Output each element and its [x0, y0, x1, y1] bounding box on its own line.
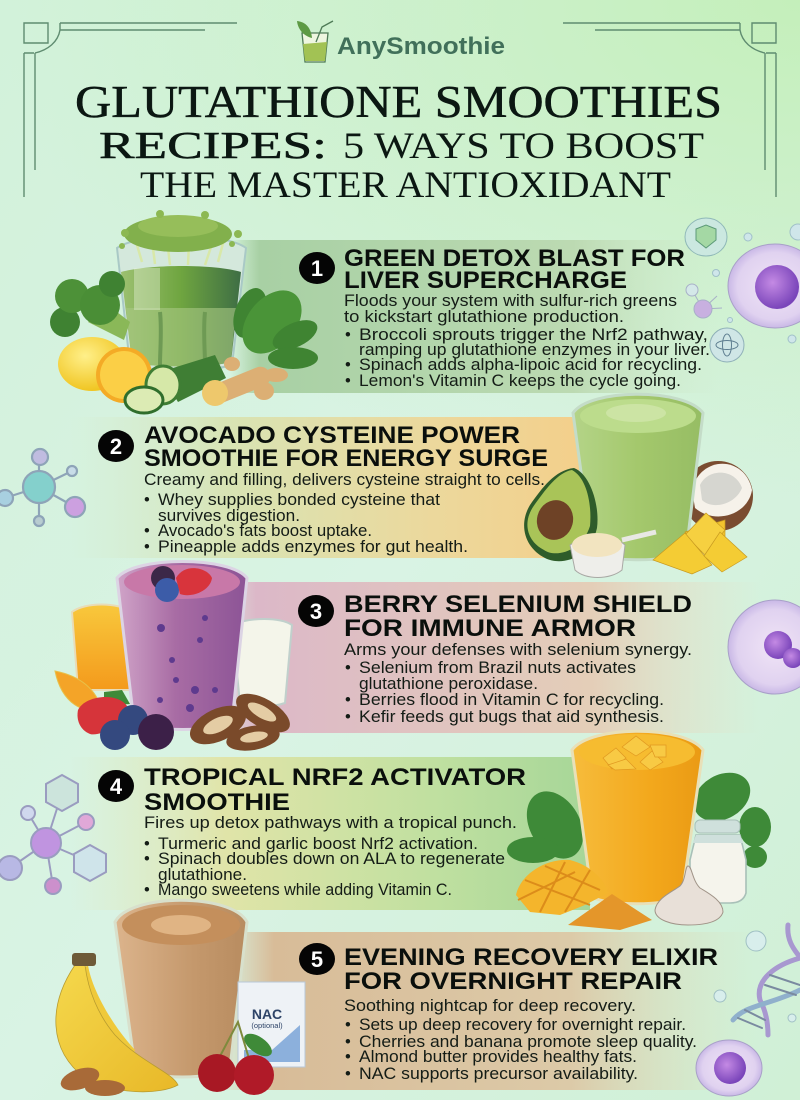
- body 4: Fires up detox pathways with a tropical punch.: [144, 814, 517, 832]
- body 2: •: [144, 522, 150, 540]
- body 3: Arms your defenses with selenium synergy.: [344, 641, 692, 659]
- icon: NAC sachet: [238, 982, 305, 1067]
- icon: green smoothie glass: [117, 236, 246, 370]
- icon: berries on top: [151, 566, 212, 602]
- icon: almonds: [58, 1063, 125, 1096]
- heading 1: GREEN DETOX BLAST FOR: [344, 245, 685, 272]
- body 5: Soothing nightcap for deep recovery.: [344, 997, 636, 1015]
- heading 4: SMOOTHIE: [144, 789, 290, 816]
- body 3: Kefir feeds gut bugs that aid synthesis.: [359, 708, 664, 726]
- title: [75, 77, 722, 206]
- recipe 5 text: [299, 943, 718, 1083]
- body 1: •: [345, 326, 351, 344]
- body 4: Turmeric and garlic boost Nrf2 activation.: [158, 835, 478, 853]
- icon: shield bubble: [685, 218, 727, 256]
- recipe 2 text: [98, 422, 548, 556]
- body 3: Selenium from Brazil nuts activates: [359, 659, 636, 677]
- brand name: AnySmoothie: [337, 33, 505, 60]
- heading 3: FOR IMMUNE ARMOR: [344, 615, 636, 642]
- icon: milk jar: [690, 820, 746, 903]
- icon: orange juice glass: [72, 604, 134, 690]
- body 5: NAC supports precursor availability.: [359, 1065, 638, 1083]
- title: 5 WAYS TO BOOST: [343, 126, 704, 167]
- icon: pineapple chunks: [653, 513, 747, 574]
- badge 2: 2: [110, 434, 122, 459]
- body 1: Lemon's Vitamin C keeps the cycle going.: [359, 372, 681, 390]
- icon: cherries: [198, 1022, 276, 1095]
- icon: spinach leaves: [507, 763, 771, 869]
- badge 1: 1: [311, 256, 323, 281]
- icon: NAC sachet: (optional): [251, 1021, 283, 1030]
- heading 5: [344, 944, 718, 995]
- body 5: •: [345, 1048, 351, 1066]
- heading 2: SMOOTHIE FOR ENERGY SURGE: [144, 445, 548, 472]
- body 4: •: [144, 881, 150, 899]
- body 3: Berries flood in Vitamin C for recycling.: [359, 691, 664, 709]
- body 1: Spinach adds alpha-lipoic acid for recycling.: [359, 356, 702, 374]
- icon: molecule left: [0, 449, 85, 526]
- icon: avocado: [524, 468, 598, 561]
- icon: small purple cell: [696, 1040, 762, 1096]
- icon: NAC sachet: NAC: [252, 1006, 282, 1022]
- icon: purple cell right: [728, 600, 800, 694]
- body 2: •: [144, 491, 150, 509]
- panel: recipe 1 background: [230, 240, 720, 393]
- icon: garlic: [655, 866, 723, 925]
- body 1: to kickstart glutathione production.: [344, 308, 624, 326]
- body 2: survives digestion.: [158, 507, 300, 525]
- body 4: •: [144, 835, 150, 853]
- body 2: [144, 471, 545, 556]
- icon: coconut: [683, 461, 753, 531]
- icon: berry smoothie glass: [117, 562, 247, 730]
- body 2: Creamy and filling, delivers cysteine straight to cells.: [144, 471, 545, 489]
- body 4: Mango sweetens while adding Vitamin C.: [158, 881, 452, 899]
- body 3: [344, 641, 692, 726]
- heading 1: [344, 245, 685, 294]
- body 2: Avocado's fats boost uptake.: [158, 522, 372, 540]
- body 1: [344, 292, 710, 390]
- body 5: •: [345, 1065, 351, 1083]
- icon: ginger: [202, 357, 288, 406]
- body 4: Spinach doubles down on ALA to regenerate: [158, 850, 505, 868]
- body 1: Floods your system with sulfur-rich greens: [344, 292, 677, 310]
- icon: mango smoothie glass: [572, 731, 703, 904]
- icon: mango cube half: [516, 860, 608, 915]
- icon: milk glass: [232, 619, 292, 707]
- icon: brazil nuts: [184, 686, 296, 755]
- badge 5: [299, 943, 335, 975]
- body 2: •: [144, 538, 150, 556]
- title: GLUTATHIONE SMOOTHIES: [75, 77, 722, 127]
- badge 4: 4: [110, 774, 123, 799]
- badge 4: [98, 770, 134, 802]
- badge 2: [98, 430, 134, 462]
- body 1: ramping up glutathione enzymes in your liver.: [359, 341, 710, 359]
- body 5: Almond butter provides healthy fats.: [359, 1048, 637, 1066]
- body 3: glutathione peroxidase.: [359, 675, 538, 693]
- icon: DNA helix: [733, 925, 800, 1035]
- panel: recipe 2 background: [70, 417, 590, 558]
- icon: blueberries: [100, 705, 148, 750]
- icon: small molecule: [686, 284, 722, 318]
- recipe 5 illustration: [56, 900, 305, 1096]
- icon: atom bubble: [710, 328, 744, 362]
- badge 1: [299, 252, 335, 284]
- body 5: [344, 997, 697, 1083]
- logo: [297, 21, 505, 62]
- heading 3: BERRY SELENIUM SHIELD: [344, 591, 692, 618]
- icon: purple cell top right: [728, 244, 800, 328]
- body 1: Broccoli sprouts trigger the Nrf2 pathway,: [359, 326, 708, 344]
- icon: tan smoothie glass: [115, 900, 247, 1077]
- heading 2: AVOCADO CYSTEINE POWER: [144, 422, 520, 449]
- icon: protein scoop: [570, 532, 656, 578]
- icon: bananas: [56, 953, 178, 1092]
- heading 1: LIVER SUPERCHARGE: [344, 267, 627, 294]
- recipe 1 text: [299, 245, 710, 390]
- body 3: •: [345, 708, 351, 726]
- icon: avocado smoothie glass: [573, 394, 703, 560]
- heading 2: [144, 422, 548, 472]
- icon: sprouts: [119, 210, 242, 265]
- recipe 2 illustration: [524, 394, 753, 578]
- heading 5: EVENING RECOVERY ELIXIR: [344, 944, 718, 971]
- icon: lemon slice: [96, 347, 152, 403]
- recipe 1 illustration: [50, 210, 322, 413]
- heading 4: TROPICAL NRF2 ACTIVATOR: [144, 764, 526, 791]
- icon: juice glass: [297, 21, 333, 62]
- recipe 3 illustration: [55, 562, 296, 755]
- heading 4: [144, 764, 526, 816]
- body 5: •: [345, 1033, 351, 1051]
- panel: recipe 4 background: [70, 757, 590, 910]
- icon: blackberry: [138, 714, 174, 750]
- body 4: [144, 814, 517, 899]
- icon: orange slice: [55, 671, 102, 711]
- body 1: •: [345, 356, 351, 374]
- title: RECIPES:: [99, 125, 327, 167]
- icon: cucumber: [125, 355, 226, 413]
- body 5: •: [345, 1016, 351, 1034]
- badge 3: 3: [310, 599, 322, 624]
- decorative frame: [24, 23, 776, 197]
- icon: molecule left lower: [0, 775, 106, 894]
- body 3: •: [345, 659, 351, 677]
- heading 3: [344, 591, 692, 642]
- body 2: Whey supplies bonded cysteine that: [158, 491, 440, 509]
- badge 5: 5: [311, 947, 323, 972]
- body 3: •: [345, 691, 351, 709]
- icon: lemon: [58, 337, 126, 391]
- recipe 3 text: [298, 591, 692, 726]
- body 4: glutathione.: [158, 866, 247, 884]
- decorative bubbles lower right: [714, 931, 796, 1022]
- icon: broccoli: [50, 271, 130, 340]
- badge 3: [298, 595, 334, 627]
- body 2: Pineapple adds enzymes for gut health.: [158, 538, 468, 556]
- body 5: Sets up deep recovery for overnight repair.: [359, 1016, 686, 1034]
- panel: recipe 3 background: [200, 582, 760, 733]
- icon: turmeric powder: [568, 894, 652, 930]
- icon: spinach: [227, 279, 322, 369]
- title: THE MASTER ANTIOXIDANT: [140, 165, 671, 206]
- body 5: Cherries and banana promote sleep quality.: [359, 1033, 697, 1051]
- body 1: •: [345, 372, 351, 390]
- recipe 4 illustration: [507, 731, 771, 930]
- body 4: •: [144, 850, 150, 868]
- panel: recipe 5 background: [220, 932, 760, 1090]
- heading 5: FOR OVERNIGHT REPAIR: [344, 968, 682, 995]
- decorative bubbles: [712, 224, 800, 343]
- recipe 4 text: [98, 764, 526, 899]
- icon: strawberry: [78, 690, 130, 734]
